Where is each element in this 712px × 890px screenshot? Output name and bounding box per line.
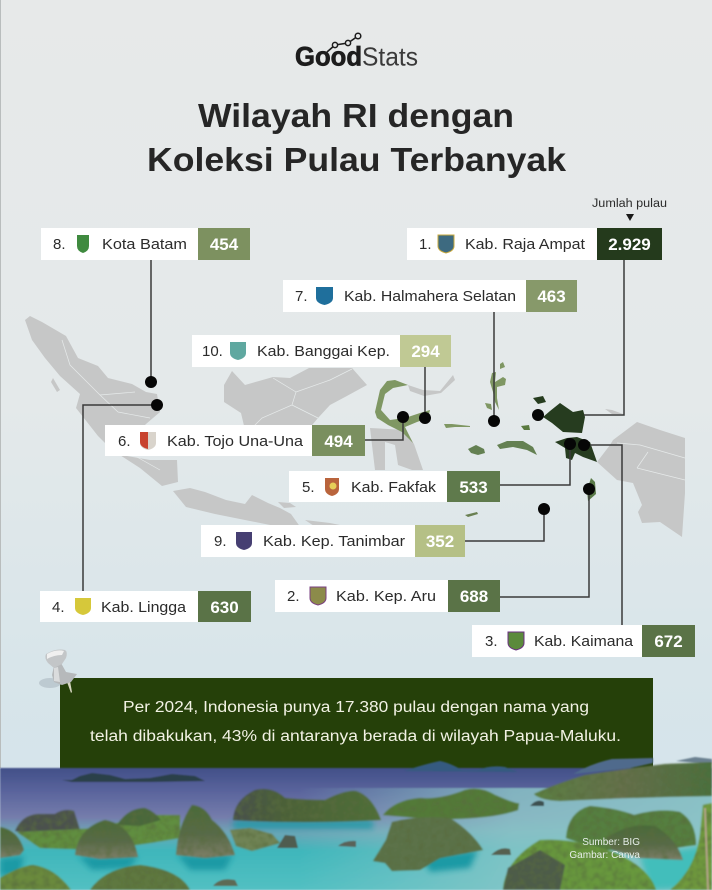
label 8 Kota Batam: 8. <box>53 236 66 253</box>
label 8 Kota Batam: 454 <box>210 235 239 254</box>
callout panel: telah dibakukan, 43% di antaranya berada di wilayah Papua-Maluku. <box>90 728 621 745</box>
bottom foreground <box>0 865 71 890</box>
label 7 Kab. Halmahera Selatan: 7. <box>295 288 308 305</box>
distant islands <box>404 761 518 772</box>
location dots <box>145 376 595 515</box>
label 10 Kab. Banggai Kep.: 294 <box>411 342 440 361</box>
photo: Raja Ampat islands <box>0 757 712 890</box>
label 2 Kab. Kep. Aru: 688 <box>460 587 488 606</box>
legend: Jumlah pulau: Jumlah pulau <box>592 198 667 210</box>
right foreground islands <box>566 806 696 850</box>
label 10 Kab. Banggai Kep.: Kab. Banggai Kep. <box>257 343 390 360</box>
label 1 Kab. Raja Ampat: 1. <box>419 236 432 253</box>
label 3 Kab. Kaimana: 672 <box>654 632 683 651</box>
dark water shadows <box>0 820 703 890</box>
label 2 Kab. Kep. Aru: Kab. Kep. Aru <box>336 588 436 605</box>
label 9 Kab. Kep. Tanimbar: 9. <box>214 533 227 550</box>
centre foreground island <box>373 817 483 871</box>
label 1 Kab. Raja Ampat: Kab. Raja Ampat <box>465 236 586 253</box>
Sumatra <box>25 316 178 486</box>
source credit: Gambar: Canva <box>569 850 640 861</box>
right edge foliage <box>670 803 712 890</box>
Sulawesi green <box>375 380 430 443</box>
connector lines <box>83 260 624 657</box>
logo: GoodStats: Stats <box>362 42 418 72</box>
label 3 Kab. Kaimana: 3. <box>485 633 498 650</box>
label 5 Kab. Fakfak: 533 <box>459 478 488 497</box>
label 7 Kab. Halmahera Selatan: 463 <box>537 287 566 306</box>
source credit: Sumber: BIG <box>582 837 640 848</box>
title <box>147 97 567 178</box>
label 4 Kab. Lingga: 4. <box>52 599 65 616</box>
label 2 Kab. Kep. Aru: 2. <box>287 588 300 605</box>
label 7 Kab. Halmahera Selatan <box>283 280 577 312</box>
callout panel: Per 2024, Indonesia punya 17.380 pulau dengan nama yang <box>123 699 589 716</box>
label 2 Kab. Kep. Aru <box>275 580 500 612</box>
Papua grey <box>597 422 685 537</box>
West Papua dark <box>543 403 585 433</box>
label 1 Kab. Raja Ampat: 2.929 <box>608 235 651 254</box>
islands <box>0 762 712 890</box>
label 3 Kab. Kaimana <box>472 625 695 657</box>
label 4 Kab. Lingga <box>40 591 251 622</box>
Sulawesi grey arms <box>408 375 455 396</box>
logo: GoodStats: Good <box>295 42 362 72</box>
label 8 Kota Batam: Kota Batam <box>102 236 187 253</box>
label 6 Kab. Tojo Una-Una: 6. <box>118 433 131 450</box>
title: Wilayah RI dengan <box>198 97 514 134</box>
centre back islands <box>233 789 381 822</box>
label 5 Kab. Fakfak <box>289 471 500 502</box>
source credit <box>569 837 640 861</box>
label 8 Kota Batam <box>41 228 250 260</box>
label 10 Kab. Banggai Kep. <box>192 335 451 367</box>
legend: Jumlah pulau <box>592 198 667 221</box>
map of Indonesia <box>25 316 685 537</box>
large right island <box>534 762 712 801</box>
Halmahera <box>485 362 506 410</box>
label 4 Kab. Lingga: 630 <box>210 598 239 617</box>
Maluku islands <box>444 424 470 428</box>
Java <box>173 488 301 528</box>
left group <box>15 810 80 835</box>
label 6 Kab. Tojo Una-Una: 494 <box>324 432 353 451</box>
label 1 Kab. Raja Ampat <box>407 228 662 260</box>
label 6 Kab. Tojo Una-Una <box>105 425 365 456</box>
label 9 Kab. Kep. Tanimbar: 352 <box>426 532 454 551</box>
Kalimantan <box>224 368 367 430</box>
label 5 Kab. Fakfak: 5. <box>302 479 315 496</box>
icon: push pin <box>39 650 77 693</box>
label 6 Kab. Tojo Una-Una: Kab. Tojo Una-Una <box>167 433 304 450</box>
logo: GoodStats <box>295 33 418 72</box>
label 9 Kab. Kep. Tanimbar: Kab. Kep. Tanimbar <box>263 533 405 550</box>
label 10 Kab. Banggai Kep.: 10. <box>202 343 223 360</box>
label 7 Kab. Halmahera Selatan: Kab. Halmahera Selatan <box>344 288 516 305</box>
label 5 Kab. Fakfak: Kab. Fakfak <box>351 479 437 496</box>
label 9 Kab. Kep. Tanimbar <box>201 525 465 557</box>
title: Koleksi Pulau Terbanyak <box>147 141 567 178</box>
callout panel <box>60 678 653 770</box>
small rocks <box>277 835 298 848</box>
label 4 Kab. Lingga: Kab. Lingga <box>101 599 187 616</box>
label 3 Kab. Kaimana: Kab. Kaimana <box>534 633 634 650</box>
